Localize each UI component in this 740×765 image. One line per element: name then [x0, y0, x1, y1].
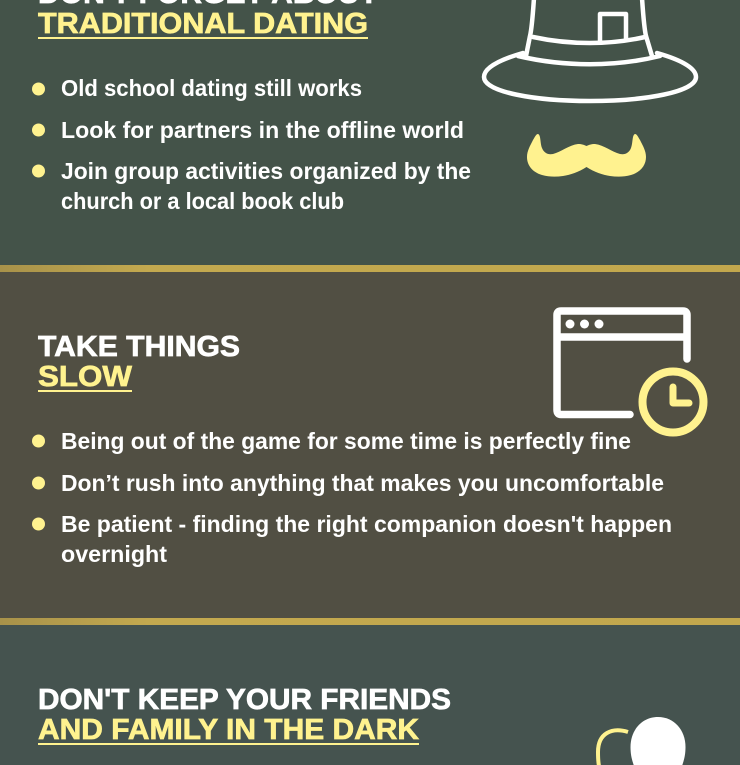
panel: friends and family [0, 625, 740, 765]
divider: gold band [0, 618, 740, 625]
heading: take things slow [38, 331, 240, 393]
bullet list: traditional dating: Look for partners in the offline world [61, 117, 464, 143]
divider: gold band [0, 265, 740, 272]
bullet list: take things slow [32, 428, 672, 567]
icon: hat [484, 0, 696, 101]
panel: take things slow [0, 272, 740, 618]
icon: moustache [527, 134, 646, 177]
heading: friends and family: AND FAMILY IN THE DARK [38, 714, 419, 746]
bullet list: traditional dating: Old school dating still works [61, 75, 362, 101]
heading: friends and family: DON'T KEEP YOUR FRIENDS [38, 684, 451, 716]
heading: take things slow: TAKE THINGS [38, 331, 240, 363]
bullet list: traditional dating [32, 75, 471, 214]
bullet list: traditional dating: church or a local book club [61, 188, 344, 214]
icon: browser window with clock [557, 311, 704, 432]
bullet list: take things slow: overnight [61, 541, 167, 567]
bullet list: take things slow: Don’t rush into anything that makes you uncomfortable [61, 470, 664, 496]
bullet list: take things slow: Be patient - finding the right companion doesn't happen [61, 511, 672, 537]
bullet list: take things slow: Being out of the game for some time is perfectly fine [61, 428, 631, 454]
icon: people [598, 717, 686, 765]
panel: traditional dating [0, 0, 740, 265]
bullet list: traditional dating: Join group activities organized by the [61, 158, 471, 184]
heading: take things slow: SLOW [38, 361, 133, 393]
heading: friends and family [38, 684, 451, 746]
heading: traditional dating: TRADITIONAL DATING [38, 8, 368, 40]
